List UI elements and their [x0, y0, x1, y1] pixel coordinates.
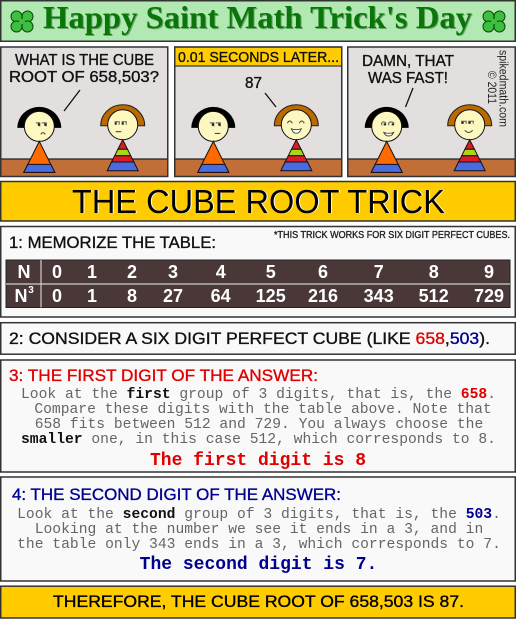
speech: cube root question: ROOT OF 658,503? [9, 69, 159, 86]
speech: damn that was fast: WAS FAST! [368, 70, 448, 87]
panel: comic 3 [348, 47, 515, 176]
character: brown hair with striped dress [101, 105, 145, 171]
panel: step 1 memorize the table [1, 226, 515, 317]
conclusion banner [1, 586, 515, 618]
step 3 result: The first digit is 8 [150, 451, 366, 471]
table of cubes: 6 [318, 262, 328, 282]
speech: 87: 87 [245, 75, 262, 92]
table of cubes: 64 [211, 286, 231, 306]
speech line [406, 88, 413, 107]
table of cubes: 0 [52, 286, 62, 306]
title text: Happy Saint Math Trick's Day [44, 0, 473, 36]
heading banner: the cube root trick: THE CUBE ROOT TRICK [73, 183, 446, 220]
panel: comic 2 [175, 47, 342, 176]
character: black hair smiling [365, 107, 409, 172]
step 3 body: Compare these digits with the table above. Note that [34, 402, 492, 418]
speech: cube root question: WHAT IS THE CUBE [15, 52, 154, 69]
panel: step 2 consider a cube: 2: CONSIDER A SIX DIGIT PERFECT CUBE (LIKE 658,503). [9, 329, 490, 348]
speech line [64, 90, 80, 111]
table of cubes: 7 [374, 262, 384, 282]
step 4 heading: 4: THE SECOND DIGIT OF THE ANSWER: [12, 485, 341, 504]
step 4 result: The second digit is 7. [140, 555, 377, 575]
table of cubes: 0 [52, 262, 62, 282]
step 4 body [17, 507, 501, 553]
credit: spikedmath.com 2011: spikedmath.com [496, 50, 508, 127]
credit: spikedmath.com 2011 [485, 50, 508, 127]
table of cubes: 2 [127, 262, 137, 282]
credit: spikedmath.com 2011: © 2011 [485, 71, 497, 104]
character: brown hair content [448, 105, 492, 171]
table of cubes: 343 [364, 286, 394, 306]
icon: left shamrock [11, 11, 33, 32]
table of cubes: 27 [163, 286, 183, 306]
step 3 body: 658 fits between 512 and 729. You always choose the [35, 417, 483, 433]
step 4 body: the table only 343 ends in a 3, which corresponds to 7. [17, 537, 501, 553]
heading banner: the cube root trick: THE CUBE ROOT TRICK [72, 183, 445, 220]
table of cubes: 512 [419, 286, 449, 306]
character: brown hair smiling [274, 105, 318, 171]
step 4 body: Looking at the number we see it ends in a 3, and in [35, 522, 483, 538]
table of cubes: 8 [429, 262, 439, 282]
table of cubes: 4 [216, 262, 226, 282]
panel: step 3 first digit [1, 360, 515, 472]
table of cubes: 5 [266, 262, 276, 282]
conclusion banner: THEREFORE, THE CUBE ROOT OF 658,503 IS 87. [53, 592, 464, 611]
panel: comic 1 [1, 47, 168, 176]
icon: right shamrock [483, 11, 505, 32]
table of cubes: N [18, 262, 30, 282]
step 1 heading: 1: MEMORIZE THE TABLE: [9, 233, 216, 252]
speech: damn that was fast: DAMN, THAT [362, 53, 455, 70]
table of cubes: 1 [87, 286, 97, 306]
table of cubes: 3 [168, 262, 178, 282]
step 3 heading: 3: THE FIRST DIGIT OF THE ANSWER: [9, 366, 318, 385]
title banner [1, 0, 515, 41]
step 3 body: Look at the first group of 3 digits, that is, the 658. [21, 387, 496, 403]
step 4 body: Look at the second group of 3 digits, that is, the 503. [17, 507, 501, 523]
step 3 body: smaller one, in this case 512, which corresponds to 8. [21, 432, 496, 448]
panel: step 2 consider a cube [1, 323, 515, 354]
character: black hair [17, 107, 61, 172]
heading banner: the cube root trick [1, 182, 515, 221]
table of cubes [6, 260, 510, 308]
speech line [265, 93, 276, 107]
table of cubes: 216 [308, 286, 338, 306]
caption: 0.01 seconds later: 0.01 SECONDS LATER... [178, 49, 339, 66]
table of cubes: 125 [256, 286, 286, 306]
step 3 body [21, 387, 496, 448]
speech: damn that was fast [362, 53, 455, 87]
table of cubes: 8 [127, 286, 137, 306]
character: black hair [191, 107, 235, 172]
table of cubes: 1 [87, 262, 97, 282]
table of cubes: 729 [474, 286, 504, 306]
table of cubes: 9 [484, 262, 494, 282]
speech: cube root question [9, 52, 159, 86]
panel: step 4 second digit [1, 477, 515, 581]
table of cubes: N [14, 286, 28, 306]
title text: Happy Saint Math Trick's Day [43, 0, 472, 35]
table of cubes: 3 [28, 285, 34, 296]
